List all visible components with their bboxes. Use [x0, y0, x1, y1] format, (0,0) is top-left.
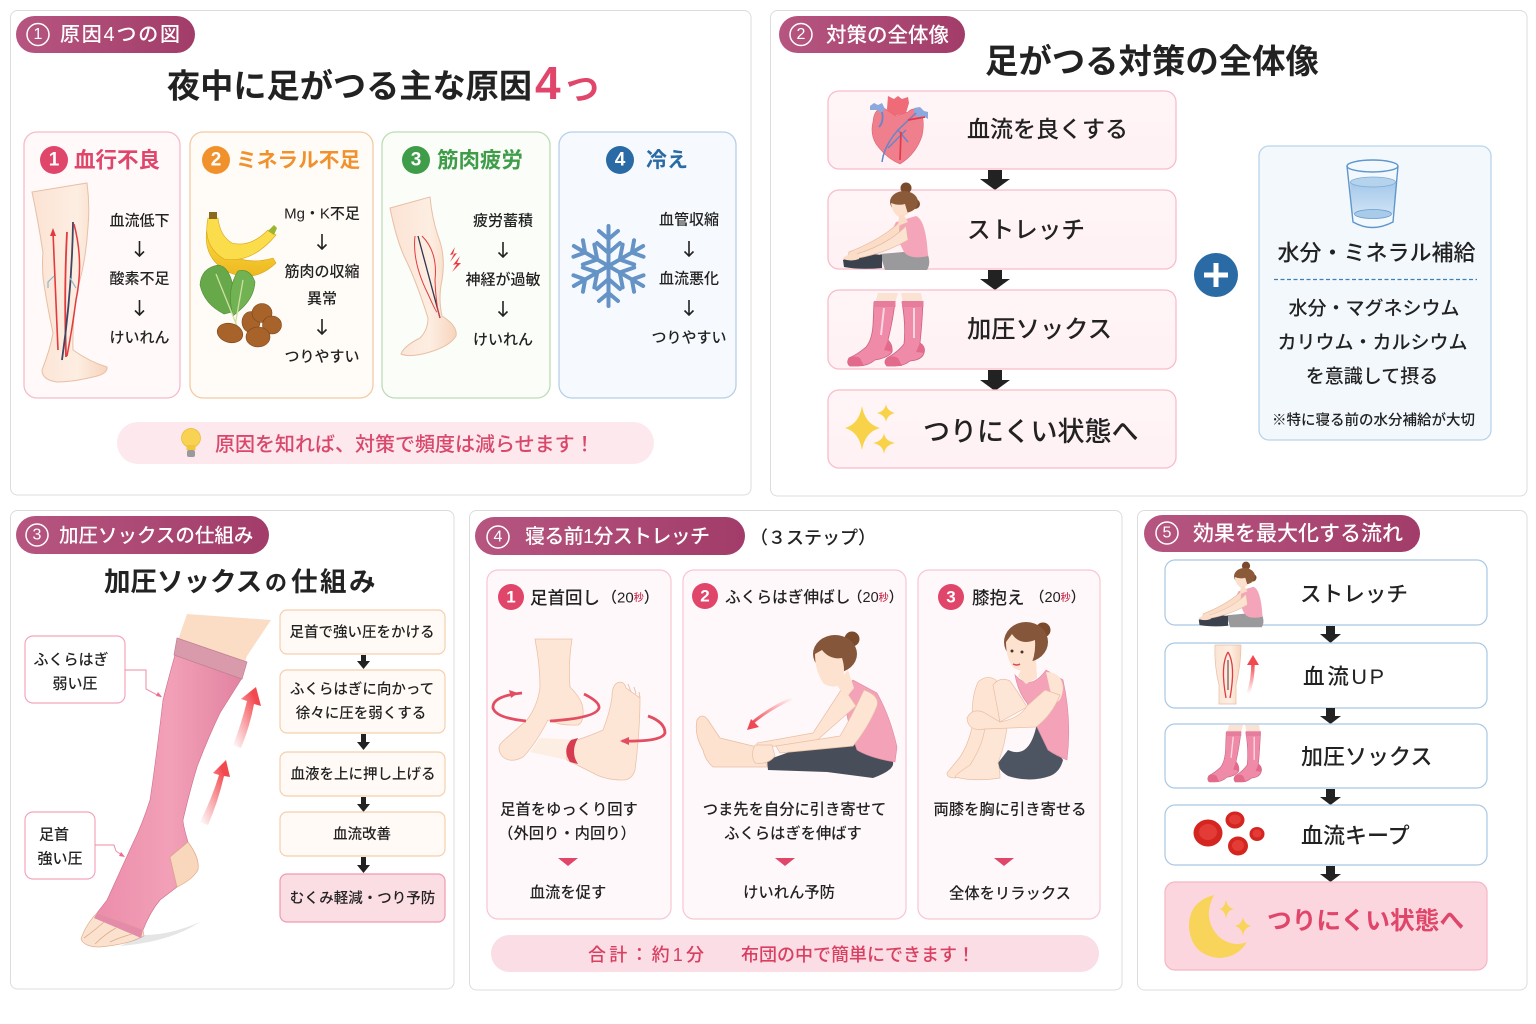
- card: step 2 calf stretch: [683, 570, 906, 919]
- header pill: stretch: 寝る前1分ストレッチ: [525, 525, 710, 548]
- icon: leg with veins and up arrow: [1215, 645, 1259, 704]
- card: step 2 calf stretch: つま先を自分に引き寄せて: [703, 802, 886, 818]
- icon: moon and stars: [1189, 895, 1251, 958]
- text: cause chain 4: 血管収縮: [659, 210, 719, 228]
- card: step 2 calf stretch: 2: [700, 586, 710, 606]
- card 3: muscle fatigue: 筋肉疲労: [437, 148, 523, 172]
- panel: water and minerals: 水分・ミネラル補給: [1277, 240, 1476, 266]
- step: compression socks: [828, 290, 1176, 369]
- flow row: stretch: [1165, 560, 1487, 627]
- card: step 3 knee hug: （20秒）: [1030, 589, 1085, 606]
- card: step 2 calf stretch: ふくらはぎ伸ばし: [725, 588, 850, 606]
- card 4: cold: [559, 132, 736, 398]
- card: step 3 knee hug: 両膝を胸に引き寄せる: [934, 802, 1086, 818]
- illustration: seated forward stretch: [696, 632, 897, 778]
- icon: tired leg: [390, 197, 461, 356]
- panel: countermeasures overview: [770, 10, 1527, 496]
- callout: calf weak pressure: [25, 636, 162, 703]
- callout: total one minute: 布団の中で簡単にできます！: [741, 945, 975, 965]
- flow row: keep blood flow: [1165, 805, 1487, 865]
- card 4: cold: 4: [615, 150, 626, 170]
- icon: banana, greens and nuts: [200, 212, 282, 347]
- header pill: overview: 2: [797, 26, 806, 43]
- arrow: down 3: [980, 370, 1010, 391]
- flow: pressure steps: 足首で強い圧をかける: [290, 623, 434, 641]
- panel: water and minerals: を意識して摂る: [1306, 366, 1438, 388]
- title: main causes: [167, 57, 599, 109]
- illustration: seated knee hug: [947, 622, 1069, 780]
- illustration: ankle rotation feet: [493, 639, 665, 780]
- panel: water and minerals: カリウム・カルシウム: [1277, 332, 1468, 354]
- illustration: compression sock: [81, 614, 271, 947]
- arrow: down 2: [980, 270, 1010, 290]
- flow: pressure steps: [280, 610, 445, 922]
- card 2: mineral deficiency: 2: [211, 150, 221, 170]
- card: step 1 ankle rotation: 1: [506, 588, 516, 606]
- title: socks: [104, 567, 378, 597]
- header pill: flow: 効果を最大化する流れ: [1193, 522, 1403, 546]
- arrow: flow 1: [1320, 626, 1341, 643]
- text: cause chain 2: 筋肉の収縮: [284, 264, 360, 280]
- step: stretch: [828, 182, 1176, 270]
- flow: pressure steps: 血液を上に押し上げる: [290, 766, 436, 783]
- text: cause chain 1: けいれん: [109, 330, 170, 346]
- text: cause chain 3: [465, 212, 541, 348]
- callout: calf weak pressure: ふくらはぎ: [33, 652, 109, 668]
- text: cause chain 4: 血流悪化: [659, 270, 719, 288]
- flow row: compression socks: [1165, 724, 1487, 788]
- icon: socks small: [1208, 725, 1262, 782]
- icon: leg with veins: [32, 183, 107, 382]
- card 2: mineral deficiency: [190, 132, 373, 398]
- flow row: final state: つりにくい状態へ: [1267, 907, 1464, 935]
- title: main causes: 4: [535, 57, 561, 109]
- text: three steps: （３ステップ）: [750, 528, 876, 548]
- card: step 1 ankle rotation: （20秒）: [602, 590, 659, 606]
- card 1: poor circulation: 血行不良: [74, 148, 160, 172]
- header pill: causes: 原因4つの図: [60, 24, 180, 46]
- card: step 1 ankle rotation: 足首をゆっくり回す: [500, 800, 638, 818]
- card 3: muscle fatigue: 3: [411, 150, 421, 170]
- card: step 2 calf stretch: けいれん予防: [743, 884, 835, 902]
- card 4: cold: 冷え: [646, 149, 688, 172]
- text: cause chain 4: [651, 210, 727, 346]
- callout: calf weak pressure: 弱い圧: [52, 676, 98, 692]
- title: main causes: つ: [566, 70, 599, 108]
- text: cause chain 2: [284, 206, 360, 366]
- flow row: final state: [1165, 882, 1487, 970]
- title: overview: 足がつる対策の全体像: [985, 43, 1319, 81]
- card: step 1 ankle rotation: 血流を促す: [530, 884, 606, 902]
- text: cause chain 2: Mg・K不足: [284, 206, 360, 222]
- callout: know the causes: [117, 422, 654, 464]
- card 1: poor circulation: [24, 132, 180, 398]
- title: socks: の: [265, 570, 287, 596]
- icon: glass of water: [1347, 160, 1398, 228]
- arrow: flow 4: [1320, 866, 1341, 882]
- step: stretch: ストレッチ: [967, 218, 1085, 244]
- panel: maximize effect flow: [1138, 510, 1527, 990]
- step: cramp-resistant state: つりにくい状態へ: [923, 417, 1138, 447]
- card: step 1 ankle rotation: 足首回し: [530, 588, 600, 608]
- card: step 1 ankle rotation: （外回り・内回り）: [498, 826, 636, 842]
- card: step 1 ankle rotation: [487, 570, 671, 919]
- header pill: flow: [1144, 515, 1420, 552]
- icon: snowflake: [568, 226, 649, 306]
- header pill: flow: 5: [1163, 524, 1172, 542]
- arrow: flow 2: [1320, 708, 1341, 724]
- text: cause chain 3: 神経が過敏: [465, 270, 541, 288]
- card 3: muscle fatigue: [382, 132, 550, 398]
- panel: water and minerals: ※特に寝る前の水分補給が大切: [1272, 411, 1475, 429]
- callout: ankle strong pressure: [25, 812, 125, 879]
- arrow: down 1: [980, 170, 1010, 190]
- flow row: keep blood flow: 血流キープ: [1301, 824, 1410, 848]
- card: step 2 calf stretch: ふくらはぎを伸ばす: [724, 826, 862, 842]
- header pill: stretch: 4: [494, 528, 503, 546]
- header pill: overview: [779, 16, 965, 53]
- panel: one-minute stretch: [470, 510, 1122, 990]
- header pill: socks: 3: [33, 526, 42, 544]
- icon: stretching woman small: [1199, 562, 1263, 627]
- flow: pressure steps: 徐々に圧を弱くする: [296, 705, 426, 722]
- callout: know the causes: 原因を知れば、対策で頻度は減らせます！: [215, 433, 595, 456]
- card: step 3 knee hug: [918, 570, 1100, 919]
- icon: stretching woman: [843, 182, 929, 270]
- text: cause chain 3: 疲労蓄積: [473, 212, 533, 230]
- panel: water and minerals: 水分・マグネシウム: [1288, 298, 1460, 320]
- text: cause chain 1: [109, 212, 170, 346]
- icon: heart: [870, 96, 928, 164]
- card 1: poor circulation: 1: [49, 150, 60, 170]
- callout: total one minute: [491, 935, 1099, 972]
- text: cause chain 1: 酸素不足: [109, 270, 170, 288]
- icon: red blood cells: [1194, 812, 1264, 856]
- header pill: stretch: [475, 517, 745, 555]
- text: cause chain 3: けいれん: [473, 332, 533, 348]
- step: improve blood flow: 血流を良くする: [967, 116, 1128, 142]
- panel: water and minerals: [1259, 146, 1491, 440]
- step: improve blood flow: [828, 91, 1176, 169]
- icon: plus: [1194, 253, 1238, 297]
- card 2: mineral deficiency: ミネラル不足: [236, 149, 360, 172]
- flow: pressure steps: むくみ軽減・つり予防: [290, 890, 435, 907]
- card: step 3 knee hug: 3: [946, 588, 956, 606]
- title: socks: 仕組み: [291, 567, 378, 597]
- flow row: blood flow up: [1165, 643, 1487, 708]
- flow row: compression socks: 加圧ソックス: [1301, 744, 1432, 770]
- header pill: causes: 1: [34, 26, 43, 43]
- panel: how compression socks work: [10, 510, 454, 989]
- step: compression socks: 加圧ソックス: [967, 316, 1112, 344]
- arrows: upward pressure: [200, 687, 261, 825]
- title: socks: 加圧ソックス: [104, 567, 262, 597]
- icon: light bulb: [182, 428, 200, 457]
- callout: ankle strong pressure: 足首: [39, 826, 69, 844]
- card: step 3 knee hug: 全体をリラックス: [949, 886, 1071, 902]
- flow row: blood flow up: 血流UP: [1303, 664, 1384, 689]
- panel: causes: [10, 10, 751, 495]
- header pill: overview: 対策の全体像: [826, 24, 949, 47]
- flow: pressure steps: 血流改善: [333, 826, 391, 843]
- callout: total one minute: 合計：約1分: [588, 945, 704, 965]
- icon: socks: [848, 293, 924, 366]
- step: cramp-resistant state: [828, 390, 1176, 468]
- title: main causes: 夜中に足がつる主な原因: [167, 68, 532, 106]
- text: cause chain 1: 血流低下: [109, 212, 170, 230]
- header pill: socks: [16, 516, 269, 554]
- callout: ankle strong pressure: 強い圧: [37, 850, 83, 868]
- flow: pressure steps: ふくらはぎに向かって: [290, 681, 434, 698]
- card: step 2 calf stretch: （20秒）: [848, 589, 903, 606]
- card: step 3 knee hug: 膝抱え: [972, 588, 1024, 608]
- text: cause chain 2: つりやすい: [284, 348, 360, 366]
- icon: sparkles: [845, 404, 895, 454]
- arrow: flow 3: [1320, 789, 1341, 805]
- text: cause chain 2: 異常: [307, 290, 337, 308]
- flow row: stretch: ストレッチ: [1300, 582, 1408, 606]
- text: cause chain 4: つりやすい: [651, 330, 727, 346]
- header pill: socks: 加圧ソックスの仕組み: [59, 525, 253, 547]
- header pill: causes: [16, 16, 195, 53]
